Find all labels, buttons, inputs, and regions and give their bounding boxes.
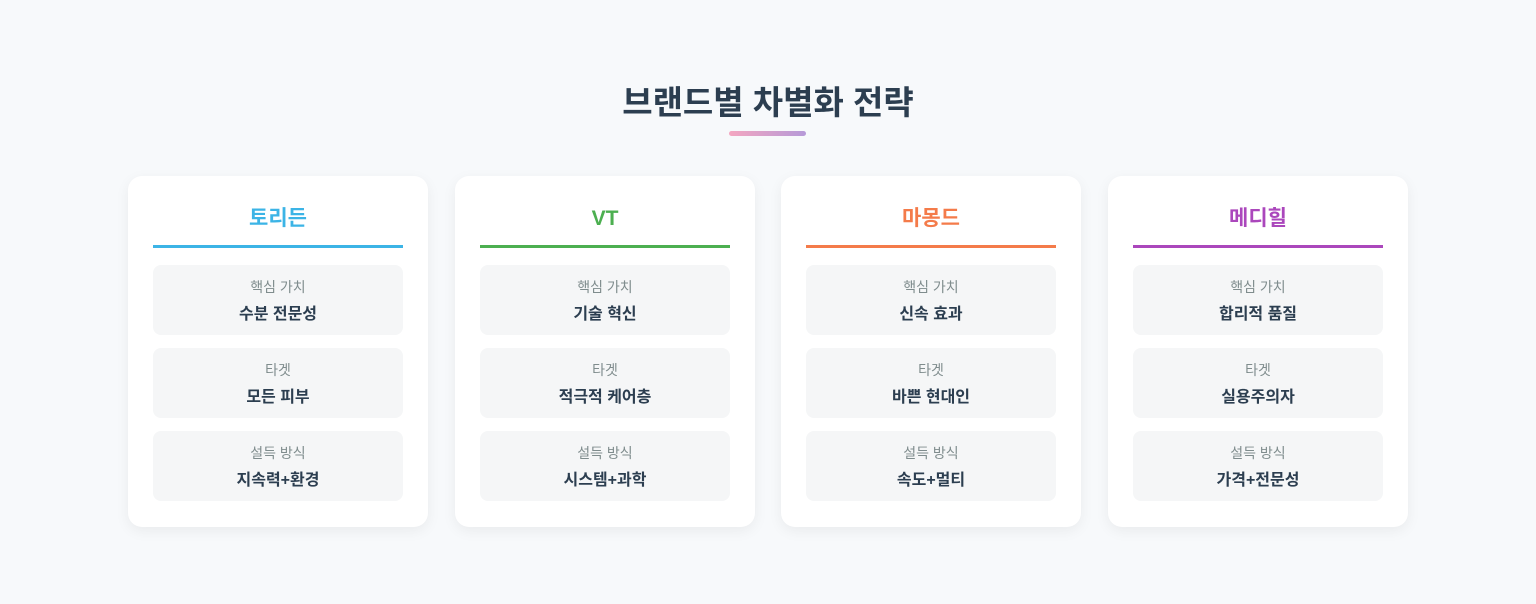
target: 적극적 케어층: [559, 389, 651, 406]
title underline: [729, 131, 806, 136]
core value: 핵심 가치: [903, 279, 959, 295]
panel: 메디힐: [1108, 176, 1408, 527]
target: [1133, 348, 1383, 418]
target: 바쁜 현대인: [892, 389, 970, 406]
core value: [480, 265, 730, 335]
persuasion: [806, 431, 1056, 501]
persuasion: 설득 방식: [1230, 445, 1286, 461]
core value: 기술 혁신: [573, 306, 637, 323]
brand name: 토리든: [249, 207, 307, 230]
target: 타겟: [592, 362, 618, 378]
target: [480, 348, 730, 418]
brand name: 마몽드: [902, 207, 960, 230]
persuasion: 설득 방식: [250, 445, 306, 461]
brand name: [480, 201, 730, 248]
core value: [806, 265, 1056, 335]
panel: 토리든: [128, 176, 428, 527]
target: [806, 348, 1056, 418]
target: [153, 348, 403, 418]
persuasion: [153, 431, 403, 501]
core value: 핵심 가치: [1230, 279, 1286, 295]
persuasion: 설득 방식: [577, 445, 633, 461]
core value: 신속 효과: [899, 306, 963, 323]
panel: VT: [455, 176, 755, 527]
target: 타겟: [1245, 362, 1271, 378]
brand name: VT: [592, 207, 618, 230]
core value: [1133, 265, 1383, 335]
persuasion: 설득 방식: [903, 445, 959, 461]
brand name: [1133, 201, 1383, 248]
title: 브랜드별 차별화 전략: [622, 84, 914, 121]
persuasion: 속도+멀티: [897, 472, 965, 489]
persuasion: [1133, 431, 1383, 501]
brand name: [153, 201, 403, 248]
target: 타겟: [918, 362, 944, 378]
core value: 핵심 가치: [250, 279, 306, 295]
brand name: [806, 201, 1056, 248]
persuasion: 시스템+과학: [564, 472, 646, 489]
persuasion: [480, 431, 730, 501]
target: 타겟: [265, 362, 291, 378]
brand name: 메디힐: [1229, 207, 1287, 230]
core value: 핵심 가치: [577, 279, 633, 295]
core value: 수분 전문성: [239, 306, 317, 323]
core value: [153, 265, 403, 335]
target: 모든 피부: [246, 389, 310, 406]
persuasion: 가격+전문성: [1217, 472, 1299, 489]
persuasion: 지속력+환경: [237, 472, 319, 489]
core value: 합리적 품질: [1219, 306, 1297, 323]
target: 실용주의자: [1221, 389, 1295, 406]
panel: 마몽드: [781, 176, 1081, 527]
